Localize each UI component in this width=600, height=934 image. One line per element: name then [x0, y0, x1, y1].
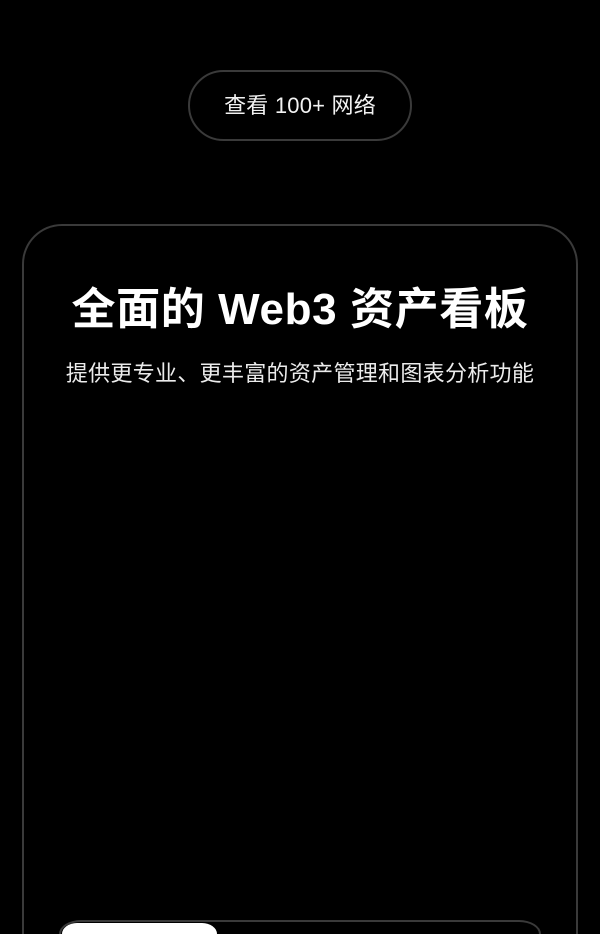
active tab	[62, 923, 217, 934]
button: view 100+ networks: 查看 100+ 网络	[224, 93, 376, 118]
heading: 全面的 Web3 资产看板	[71, 285, 529, 334]
subheading: 提供更专业、更丰富的资产管理和图表分析功能	[66, 361, 534, 386]
inner tab bar	[59, 920, 541, 934]
panel: Web3 asset dashboard	[22, 224, 578, 934]
button: view 100+ networks	[188, 70, 412, 141]
